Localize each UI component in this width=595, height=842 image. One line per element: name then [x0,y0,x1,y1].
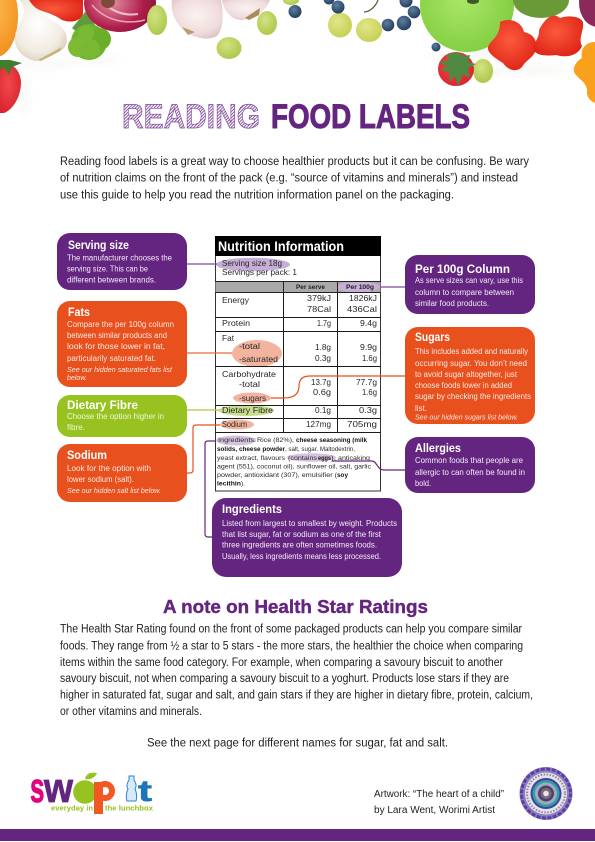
callout: sugars: sugar by checking the ingredients [415,392,531,401]
row: energy: 379kJ [307,293,331,303]
title [122,98,470,136]
row: carbohydrate [222,369,377,403]
callout: sugars: See our hidden sugars list below. [415,414,518,422]
icon: garlic middle [172,0,223,39]
health star ratings text: items within the same food category. For example, when comparing a savoury biscuit to another [60,657,503,669]
row: protein: 9.4g [360,318,377,328]
serving lines [222,258,297,277]
callout: per 100g column [405,255,535,314]
callout: sodium: lower sodium (salt). [67,475,134,484]
icon: water bottle [126,776,137,801]
callout: sodium: Sodium [67,448,107,462]
ingredients list: agent (551), coconut oil), sunflower oil, salt, garlic [217,464,372,470]
callout: sodium [57,444,187,502]
ingredients list: Ingredients: [218,437,256,444]
callout: fats: between similar products and [67,331,167,340]
icon: blueberries [288,0,440,52]
connector: sodium [187,425,220,473]
logo: swop it: t [138,775,152,808]
row: fat: Fat [222,333,235,343]
connector: serving size [187,263,217,265]
row: sodium: 127mg [306,419,331,429]
row: energy: 1826kJ [349,293,377,303]
icon: orange pepper [574,42,595,103]
logo: swop it: s [30,764,44,811]
callout: sodium: See our hidden salt list below. [67,488,161,495]
row: carbohydrate: Carbohydrate [222,369,276,379]
callout: sugars: choose foods lower in added [415,381,512,390]
callout: serving size: The manufacturer chooses the [67,254,173,263]
intro text [60,156,529,201]
row: energy: 78Cal [307,304,331,314]
connector: fats [187,352,232,354]
row: dietary fibre [222,405,377,415]
ingredients list: yeast extract, flavours [217,455,286,462]
health star ratings text: foods. They range from ½ a star to 5 stars - the more stars, the healthier the choice when comparing [60,640,523,652]
health star ratings text: or other vitamins and minerals. [60,706,202,718]
row: energy [222,293,377,314]
title: READING [122,98,260,136]
row: protein [222,318,377,328]
fruit and vegetable banner [0,0,595,115]
callout: allergies [405,437,535,493]
row: fat: 0.3g [315,353,331,363]
callout: sugars: occurring sugar. You don’t need [415,359,527,368]
ingredients list: cheese seasoning (milk [296,437,367,444]
nutrition information panel [215,236,381,491]
ingredients list [217,437,372,488]
callout: sodium: Look for the option with [67,464,151,473]
connector: per 100g [380,286,405,288]
icon: strawberry left [0,60,22,113]
callout: ingredients: Ingredients [222,502,282,516]
table header [215,236,381,256]
callout: serving size: different between brands. [67,276,156,285]
row: sodium: 705mg [347,419,377,429]
callout: dietary fibre: Choose the option higher in [67,412,164,421]
column headings [215,282,381,292]
callout: sugars: Sugars [415,330,450,344]
icon: broccoli [68,11,111,60]
row: sodium: Sodium [222,419,247,429]
heading: health star ratings: A note on Health Star Ratings [163,597,428,617]
callout: allergies: Allergies [415,441,461,455]
ingredients list: lecithin [217,480,241,488]
row: carbohydrate: -total [239,379,260,389]
callout: dietary fibre: fibre. [67,423,85,432]
connector: sugars [271,376,405,398]
callout: fats: particularily saturated fat. [67,354,156,363]
row: carbohydrate: 77.7g [356,377,377,387]
callout: dietary fibre [57,395,187,437]
icon: red pepper one [488,20,536,70]
ingredients list: (contains [288,455,318,462]
footer bar [0,829,595,841]
row: carbohydrate: 0.6g [313,387,331,397]
icon: garlic right [222,0,270,20]
row: protein: 1.7g [317,318,331,328]
callout: fats [57,301,187,387]
artwork credit [374,789,504,816]
callout: per 100g column: similar food products. [415,299,489,308]
icon: strawberry right [438,52,476,86]
icon: green apple [420,0,514,52]
icon: red pepper two [534,16,583,56]
table header: Nutrition Information [218,239,344,254]
callout: fats: Fats [68,305,90,319]
health star ratings text: higher in saturated fat, sugar and salt, and gain stars if they are higher in dietary fibre, protein, calcium, [60,689,533,701]
row: dietary fibre: 0.3g [359,405,377,415]
callout: allergies: allergic to can often be found in [415,468,525,477]
icon: apple [73,773,97,804]
health star ratings text [60,624,533,718]
callout: dietary fibre: Dietary Fibre [67,398,138,412]
row: carbohydrate: -sugars [239,393,266,403]
icon: red onion [84,0,156,32]
callout: fats: See our hidden saturated fats list [67,367,173,374]
callout: fats: below. [67,375,87,382]
serving lines: Serving size 18g [222,258,282,268]
connector: allergies [332,461,405,470]
callout: allergies: Common foods that people are [415,456,524,465]
ingredients list: anticaking [338,455,370,462]
serving lines: Servings per pack: 1 [222,267,297,277]
callout: per 100g column: As serve sizes can vary, use this [415,276,523,285]
logo: swop it: w [43,764,73,811]
intro text: use this guide to help you read the nutrition information panel on the packaging. [60,189,454,201]
intro text: Reading food labels is a great way to choose healthier products but it can be confusing. Be wary [60,156,529,168]
callout: per 100g column: Per 100g Column [415,262,510,276]
icon: red capsicum top [29,0,83,22]
row: sodium [222,419,377,429]
callout: ingredients [212,498,402,577]
health star ratings text: savoury biscuit, not when comparing a savoury biscuit to a yoghurt. Products lose stars if they are [60,673,509,685]
title: FOOD LABELS [271,98,470,136]
connector: dietary fibre [187,409,220,411]
logo: swop it: the lunchbox [105,806,153,812]
artwork credit: by Lara Went, Worimi Artist [374,805,495,816]
callout: fats: Compare the per 100g column [67,320,174,329]
icon: green grapes [147,0,493,83]
ingredients list: powder, antioxidant (307), emulsifier ( [217,472,338,479]
callout: ingredients: Listed from largest to smallest by weight. Products [222,519,397,528]
logo: swop it: everyday in [51,806,93,812]
callout: sugars: This includes added and naturally [415,347,528,356]
icon: artwork circle [520,767,572,820]
ingredients list: soy [337,472,348,479]
row: carbohydrate: 1.6g [362,387,377,397]
ingredients list: ). [241,480,245,488]
health star ratings text: The Health Star Rating found on the front of some packaged products can help you compare similar [60,624,522,636]
next page note: See the next page for different names for sugar, fat and salt. [147,738,448,750]
letter p [98,782,112,814]
logo: swop it [30,764,153,814]
ingredients list: , salt, sugar. Maltodextrin, [285,446,355,453]
row: energy: 436Cal [347,304,377,314]
callout: sugars: list. [415,404,427,413]
callout: allergies: bold. [415,479,431,488]
column headings: Per 100g [346,284,374,291]
callout: serving size: Serving size [68,238,129,252]
callout: serving size [57,233,187,290]
icon: purple onion right [579,0,595,27]
callout: serving size: serving size. This can be [67,265,148,274]
row: fat: -saturated [239,354,278,364]
row: fat [222,333,377,364]
callout: ingredients: that list sugar, fat or sodium as one of the first [222,530,382,539]
row: fat: -total [239,341,260,351]
highlights [216,258,336,462]
ingredients list: solids, cheese powder [217,446,285,453]
callout: ingredients: three ingredients are often sometimes foods. [222,540,377,550]
column headings: Per serve [296,285,326,291]
row: protein: Protein [222,318,250,328]
row: dietary fibre: 0.1g [315,405,331,415]
connector: ingredients [205,441,216,537]
row: dietary fibre: Dietary Fibre [222,405,273,415]
icon: lime [513,0,569,18]
ingredients list: eggs [318,455,331,462]
row: fat: 1.8g [315,342,331,352]
callout: sugars: to avoid sugar altogether, just [415,370,518,379]
table frame [215,236,381,491]
row: fat: 1.6g [362,353,377,363]
row: energy: Energy [222,295,250,305]
callout: sugars [405,327,535,424]
callout: ingredients: Usually, less ingredients means less processed. [222,552,381,561]
icon: stem [364,0,378,12]
icon: garlic left [15,0,67,61]
ingredients list: ), [331,455,336,462]
callout: fats: look for those lower in fat, [67,342,165,351]
row: carbohydrate: 13.7g [311,377,331,387]
artwork credit: Artwork: “The heart of a child” [374,789,504,800]
callout: per 100g column: column to compare between [415,288,514,297]
ingredients list: Rice (82%), [257,437,294,444]
icon: orange left [0,0,18,57]
row: fat: 9.9g [360,342,377,352]
intro text: of nutrition claims on the front of the pack (e.g. “source of vitamins and minerals”) and instead [60,173,518,185]
